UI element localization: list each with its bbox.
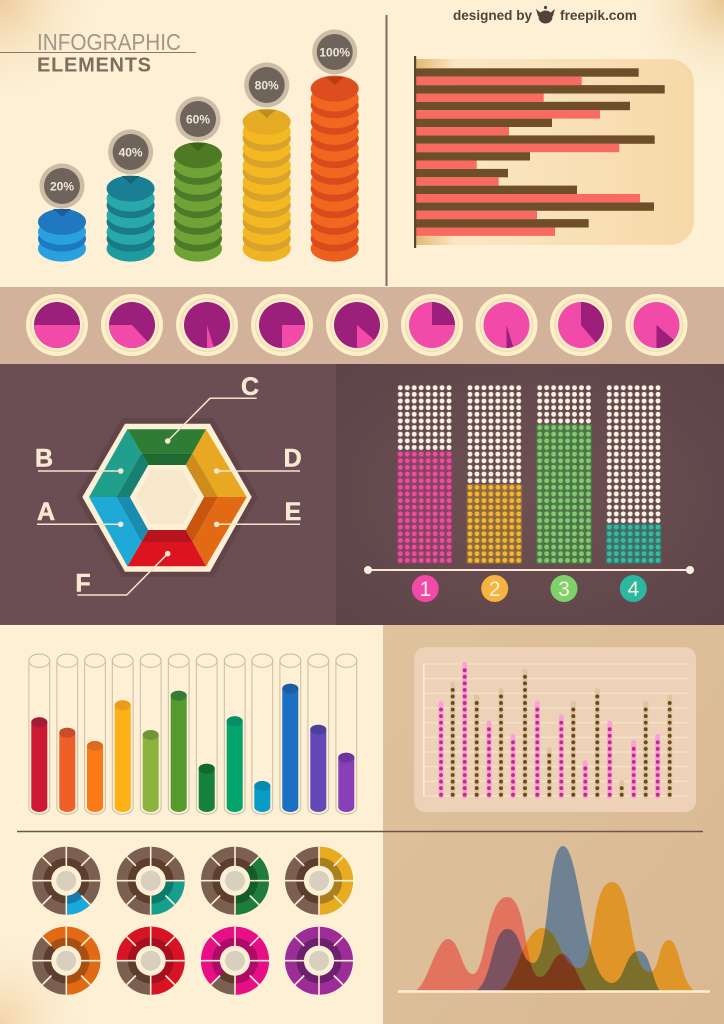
panel: dotted column chart xyxy=(414,647,696,812)
area: blue series xyxy=(475,846,660,991)
hexagon center xyxy=(130,465,204,530)
background: pie strip xyxy=(0,287,724,364)
coin stack 40%: 40% xyxy=(119,146,143,160)
donut 6: red xyxy=(117,927,185,995)
tube 3 xyxy=(85,654,105,814)
pie 4 xyxy=(251,294,313,356)
horizontal divider xyxy=(17,830,703,832)
dot column 1 xyxy=(397,384,452,564)
number badge 1 xyxy=(412,575,439,602)
tube 8 xyxy=(224,654,245,814)
background: top cream area xyxy=(0,0,724,287)
tube 11 xyxy=(308,654,329,814)
coin stack 80% xyxy=(243,62,291,262)
donut 5: orange xyxy=(26,920,107,1001)
segment B: teal xyxy=(89,429,148,497)
axis line xyxy=(364,566,694,574)
background: lower-left shade xyxy=(0,924,100,1024)
pie 5 xyxy=(326,294,388,356)
dot matrix chart xyxy=(364,384,694,602)
background: top-right shade xyxy=(624,0,724,100)
label C xyxy=(165,373,259,444)
area chart xyxy=(398,846,710,992)
label D: D xyxy=(284,444,302,472)
label F xyxy=(75,551,170,598)
coin stack 100%: 100% xyxy=(319,46,350,60)
pie 7 xyxy=(476,294,538,356)
coin stack 80%: 80% xyxy=(255,78,279,92)
tube 4 xyxy=(112,654,133,814)
number badge 2: 2 xyxy=(489,578,501,601)
dot column 2 xyxy=(467,384,522,564)
segment C: green xyxy=(127,429,206,465)
panel: horizontal bar chart xyxy=(414,56,694,248)
hexagon diagram xyxy=(35,373,302,598)
number badge 2 xyxy=(481,575,508,602)
area: orange series xyxy=(500,882,695,991)
brown dot columns xyxy=(453,671,670,796)
donut 4: yellow xyxy=(285,847,353,915)
background: dark left panel xyxy=(0,364,336,625)
segment A: blue xyxy=(89,497,148,566)
donut 8: purple xyxy=(285,927,353,995)
number badge 1: 1 xyxy=(419,578,431,601)
dot column 3 xyxy=(536,384,592,564)
segment D: yellow xyxy=(186,429,247,497)
label D xyxy=(214,444,302,474)
donut 1: blue xyxy=(32,847,100,915)
label B xyxy=(35,444,123,474)
label E xyxy=(214,498,301,527)
label B: B xyxy=(35,444,53,472)
icon: freepik mascot xyxy=(536,6,555,24)
tube 7 xyxy=(196,654,217,814)
pie row xyxy=(26,294,688,356)
coin stack chart xyxy=(38,30,359,262)
freepik credit: designed by xyxy=(453,8,532,23)
tube 6 xyxy=(168,654,189,814)
background: dark right panel xyxy=(336,364,724,625)
pie 1: half xyxy=(26,294,88,356)
background: top-left shade xyxy=(0,0,110,110)
title xyxy=(0,29,196,76)
vertical divider xyxy=(386,15,388,286)
coin stack 60% xyxy=(174,96,222,262)
number badge 3 xyxy=(550,575,578,602)
overlap: all three series xyxy=(502,951,586,990)
overlap: red and blue xyxy=(476,929,574,990)
coin stack 40% xyxy=(107,130,155,262)
segment E: orange xyxy=(186,497,247,566)
label C: C xyxy=(241,373,259,401)
test tube chart xyxy=(29,654,357,814)
tube 2 xyxy=(57,654,78,814)
label F: F xyxy=(75,570,91,598)
donut charts xyxy=(26,847,353,1001)
pie 2 xyxy=(101,294,163,356)
baseline xyxy=(398,990,710,993)
number badge 4: 4 xyxy=(627,578,639,601)
pink dot columns xyxy=(441,664,658,796)
coin stack 20% xyxy=(38,164,86,262)
tube 1 xyxy=(29,654,50,814)
pie 8 xyxy=(550,294,612,356)
pie 9 xyxy=(626,294,688,356)
donut 2: teal xyxy=(117,847,185,915)
background: lower right tan area xyxy=(383,625,724,1024)
segment F: red xyxy=(127,530,206,566)
pie 6 xyxy=(401,294,463,356)
tube 12 xyxy=(336,654,357,814)
freepik credit xyxy=(453,6,637,24)
title: ELEMENTS xyxy=(37,54,151,76)
donut 7: pink xyxy=(195,920,275,1001)
dot column 4 xyxy=(606,384,662,564)
coin stack 60%: 60% xyxy=(186,112,210,126)
tube 9 xyxy=(252,654,273,814)
label E: E xyxy=(285,498,301,526)
pie 3 xyxy=(176,294,238,356)
donut 3: green xyxy=(201,847,269,915)
title: INFOGRAPHIC xyxy=(37,29,181,55)
background: lower left cream area xyxy=(0,625,383,1024)
axis xyxy=(414,56,416,248)
coin stack 20%: 20% xyxy=(50,180,74,194)
label A: A xyxy=(37,498,55,526)
label A xyxy=(37,498,123,527)
overlap: orange and blue xyxy=(502,928,660,990)
number badge 4 xyxy=(620,575,647,602)
tube 10 xyxy=(280,654,301,814)
tube 5 xyxy=(140,654,161,814)
freepik credit: freepik.com xyxy=(560,8,637,23)
coin stack 100% xyxy=(311,30,359,262)
pink bars xyxy=(416,77,640,236)
overlap: orange and red xyxy=(502,943,574,990)
area: red series xyxy=(415,897,587,991)
number badge 3: 3 xyxy=(558,578,570,601)
brown bars xyxy=(416,68,665,228)
